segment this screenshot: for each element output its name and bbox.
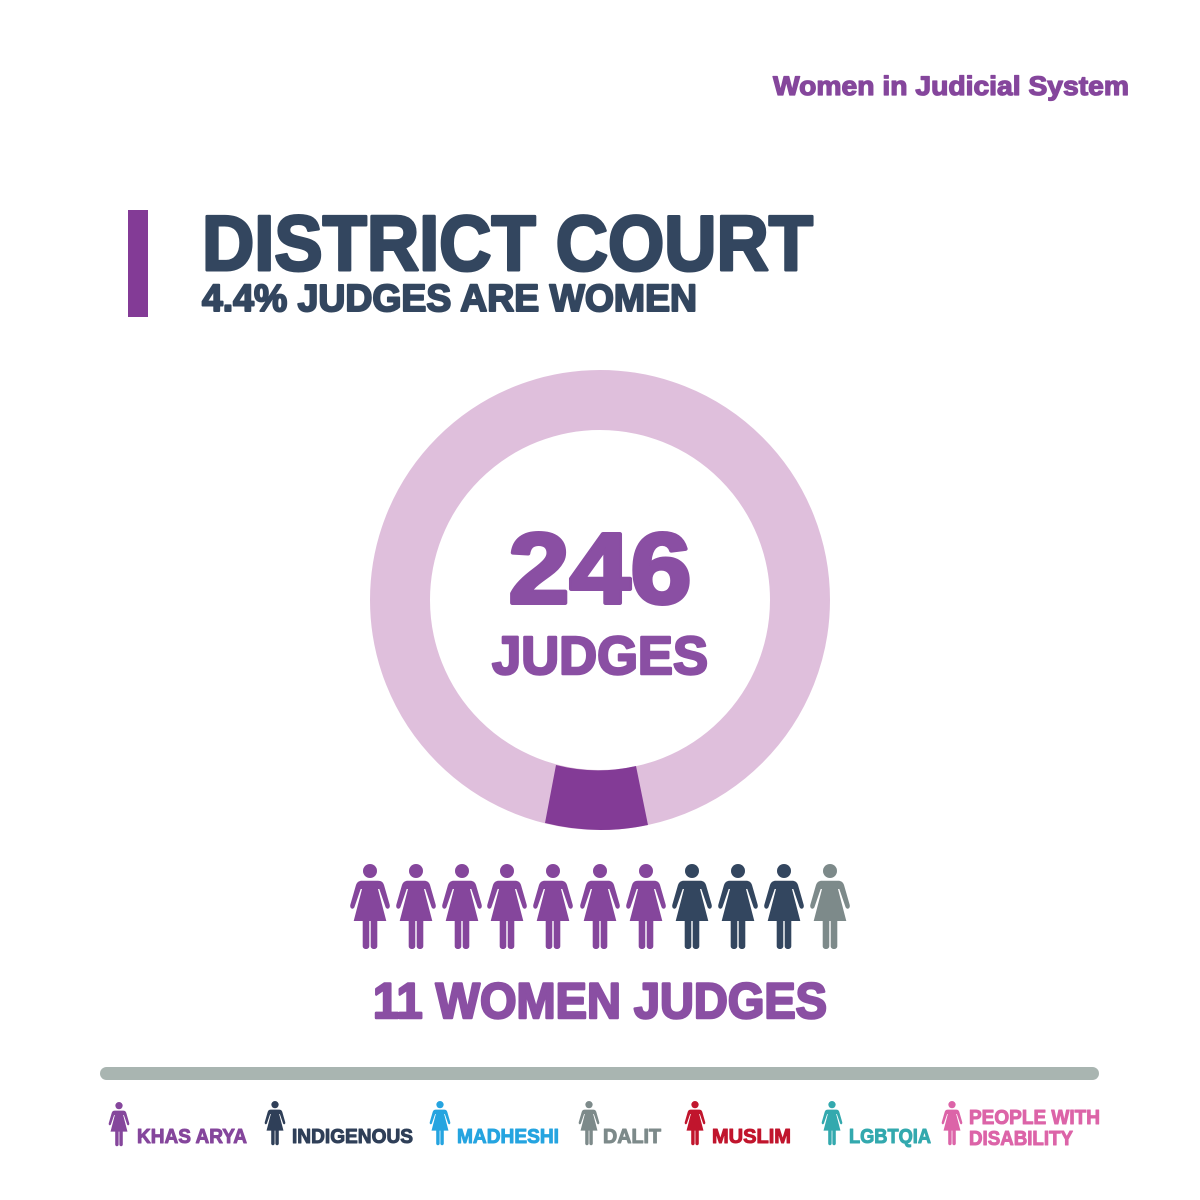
pictogram caption: 11 WOMEN JUDGES [373, 973, 827, 1029]
heading block [202, 199, 813, 320]
legend: Muslim [685, 1101, 791, 1148]
title: DISTRICT COURT [202, 199, 813, 287]
legend: Indigenous: INDIGENOUS [292, 1126, 413, 1148]
total number: 246 [508, 513, 692, 625]
donut ring: all judges [400, 400, 800, 800]
legend: People with Disability: PEOPLE WITH [969, 1107, 1100, 1129]
legend: Khas Arya [109, 1102, 247, 1148]
total label: JUDGES [492, 626, 708, 686]
legend: Muslim: MUSLIM [712, 1126, 791, 1148]
donut chart [400, 400, 800, 830]
subtitle: 4.4% JUDGES ARE WOMEN [202, 278, 697, 320]
legend: Dalit: DALIT [603, 1126, 661, 1148]
legend: Madheshi [430, 1101, 559, 1148]
legend [109, 1101, 1100, 1150]
legend: People with Disability: DISABILITY [969, 1128, 1074, 1150]
divider bar [100, 1067, 1099, 1080]
pictogram: 11 women judges [350, 864, 850, 949]
legend: Dalit [579, 1101, 661, 1148]
legend: Indigenous [265, 1101, 413, 1148]
report label: Women in Judicial System [773, 71, 1129, 101]
legend: Khas Arya: KHAS ARYA [137, 1126, 247, 1148]
legend: LGBTQIA [822, 1101, 931, 1148]
donut segment: women judges [545, 765, 648, 830]
section accent bar [128, 210, 148, 317]
legend: People with Disability [942, 1101, 1100, 1150]
legend: LGBTQIA: LGBTQIA [849, 1126, 931, 1148]
legend: Madheshi: MADHESHI [457, 1126, 559, 1148]
